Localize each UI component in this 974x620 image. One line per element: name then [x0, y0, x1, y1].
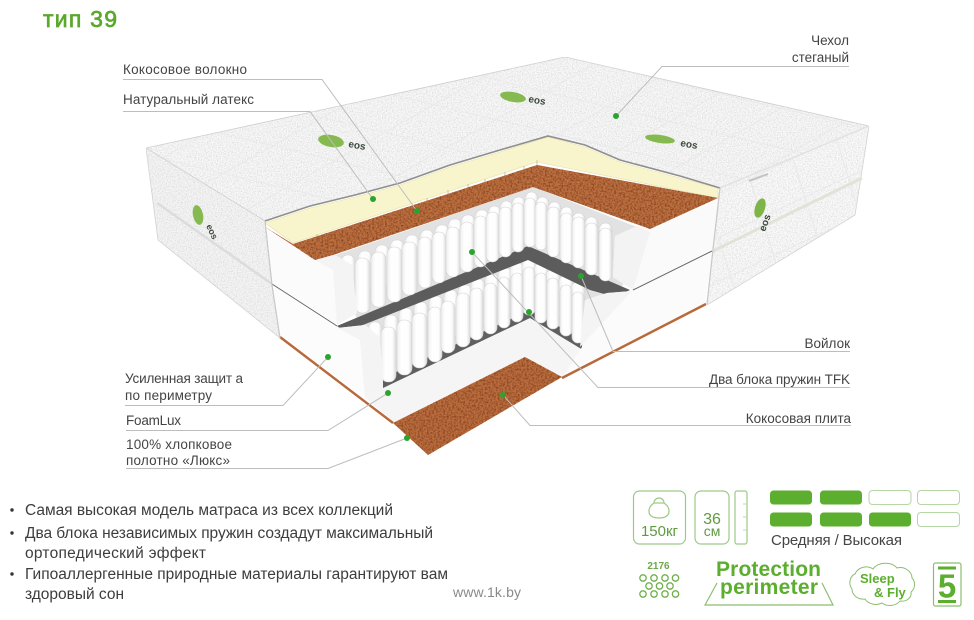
cover cut edge	[265, 188, 720, 338]
label: FoamLux	[126, 390, 391, 430]
icon: 5 zones	[934, 563, 961, 606]
feature bullet list: Два блока независимых пружин создадут максимальный	[25, 525, 433, 542]
label: Усиленная защита по периметру: по периметру	[125, 388, 212, 403]
logos on cover	[191, 90, 774, 241]
coconut plate	[393, 357, 562, 455]
mattress cutaway illustration	[146, 57, 869, 455]
label: Войлок	[578, 273, 850, 352]
title: тип 39	[43, 6, 117, 32]
upper felt layer	[337, 246, 630, 332]
firmness rating bars: Средняя / Высокая	[771, 532, 902, 549]
badge: Sleep & Fly: & Fly	[874, 585, 907, 600]
label: Войлок: Войлок	[804, 336, 850, 351]
feature bullet list	[10, 502, 448, 603]
badge: Sleep & Fly: Sleep	[860, 571, 895, 586]
icon: 5 zones: 5	[938, 568, 956, 604]
feature bullet list: Гипоаллергенные природные материалы гарантируют вам	[25, 566, 448, 583]
cover right side	[707, 126, 869, 305]
label: Кокосовое волокно	[123, 62, 420, 214]
feature bullet list: здоровый сон	[25, 586, 124, 603]
label: 100% хлопковое полотно Люкс: полотно «Люкс»	[126, 453, 230, 468]
watermark: www.1k.by	[452, 584, 521, 600]
upper spring block	[341, 192, 612, 313]
cover top surface	[146, 57, 869, 221]
logos on cover: eos	[679, 138, 699, 152]
icon: 2176 springs	[640, 561, 679, 597]
feature bullet list: Самая высокая модель матраса из всех коллекций	[25, 502, 393, 519]
label: Натуральный латекс	[123, 92, 376, 202]
lower spring block	[368, 259, 585, 382]
label: Натуральный латекс: Натуральный латекс	[123, 92, 254, 107]
badge: Protection perimeter	[705, 558, 833, 605]
cover left side	[146, 148, 280, 338]
label: Кокосовое волокно: Кокосовое волокно	[123, 62, 247, 77]
label: Усиленная защита по периметру	[125, 354, 331, 406]
badge: Sleep & Fly	[850, 563, 915, 605]
icon: height 36 cm	[695, 491, 747, 544]
label: Два блока пружин TFK	[469, 249, 850, 388]
latex layer	[265, 136, 720, 243]
white floor foam	[365, 318, 600, 423]
label: Кокосовая плита	[500, 392, 851, 426]
icon: load 150 kg: 150кг	[641, 523, 679, 540]
icon: 2176 springs: 2176	[647, 561, 670, 572]
coconut bottom strips	[280, 304, 706, 423]
firmness rating bars	[770, 490, 960, 549]
label: 100% хлопковое полотно Люкс: 100% хлопковое	[126, 437, 232, 452]
label: Чехол стеганый: Чехол	[811, 33, 849, 48]
badge: Protection perimeter: Protection	[716, 558, 821, 581]
lower spring felt	[383, 310, 583, 388]
label: Чехол стеганый	[613, 33, 849, 119]
logos on cover: eos	[757, 213, 774, 233]
logos on cover: eos	[204, 223, 220, 241]
icon: height 36 cm: см	[704, 523, 720, 539]
icon: load 150 kg	[634, 491, 686, 544]
icon: height 36 cm: 36	[703, 511, 721, 528]
label: Кокосовая плита: Кокосовая плита	[746, 411, 851, 426]
logos on cover: eos	[347, 139, 367, 153]
logos on cover: eos	[527, 94, 547, 108]
label: Чехол стеганый: стеганый	[792, 50, 849, 65]
label: 100% хлопковое полотно Люкс	[126, 435, 410, 468]
label: Усиленная защита по периметру: Усиленная защит а	[125, 371, 243, 386]
label: FoamLux: FoamLux	[126, 413, 181, 428]
coconut top layer	[265, 165, 718, 260]
foam perimeter blocks	[267, 200, 718, 397]
label: Два блока пружин TFK: Два блока пружин TFK	[709, 372, 850, 387]
spring cavity back wall	[333, 187, 650, 388]
badge: Protection perimeter: perimeter	[720, 576, 818, 599]
feature bullet list: ортопедический эффект	[25, 545, 206, 562]
